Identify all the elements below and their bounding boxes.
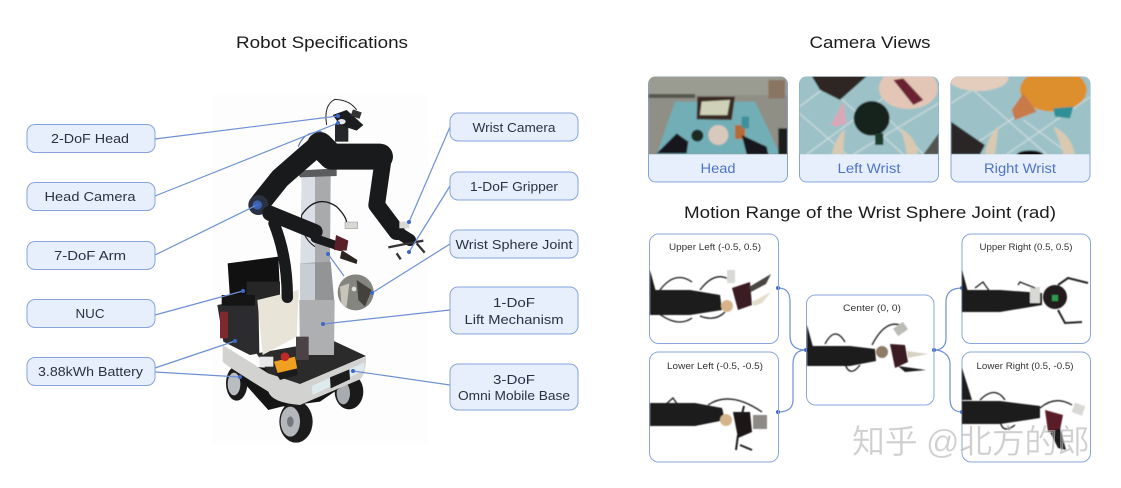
leader: battery [155, 339, 242, 379]
leader: wrist sphere joint [326, 244, 450, 295]
arm photo [807, 322, 928, 372]
leader: NUC [155, 289, 245, 315]
panel: Upper Left [650, 234, 778, 344]
label: 2-DoF Head [27, 124, 155, 152]
caption: Left Wrist: Left Wrist [838, 161, 901, 176]
label: Wrist Camera: Wrist Camera [472, 120, 556, 135]
leader: head camera [155, 121, 340, 196]
NUC [247, 282, 280, 302]
back left wheel [226, 366, 247, 401]
arm photo [650, 270, 771, 322]
caption: Right Wrist: Right Wrist [984, 161, 1056, 176]
base top deck [257, 340, 366, 384]
panel: Upper Right [962, 234, 1090, 344]
panel: left wrist camera [799, 76, 939, 182]
battery [217, 295, 259, 355]
heading: Robot Specifications: Robot Specifications [236, 34, 408, 52]
label: Wrist Sphere Joint [450, 230, 578, 258]
label: 3-DoF Omni Mobile Base: Omni Mobile Base [458, 388, 570, 403]
base shell [223, 345, 366, 405]
label: NUC: NUC [76, 306, 104, 321]
label: 3-DoF Omni Mobile Base [450, 364, 578, 410]
arm photo [962, 368, 1085, 450]
arm photo [962, 270, 1088, 323]
label: 1-DoF Lift Mechanism: 1-DoF [493, 295, 535, 310]
label: 1-DoF Lift Mechanism: Lift Mechanism [464, 312, 564, 327]
base underside [238, 367, 347, 410]
electronics box [257, 290, 299, 355]
photo: head view [648, 73, 790, 157]
leader: gripper [407, 186, 450, 254]
label: Head Camera: Head Camera [44, 189, 136, 204]
connectors [776, 286, 964, 414]
arm photo [650, 398, 767, 450]
caption: Lower Right (0.5, -0.5) [976, 361, 1074, 372]
base light strip [312, 363, 365, 395]
label: 3-DoF Omni Mobile Base: 3-DoF [493, 372, 535, 387]
caption: Center (0, 0) [843, 303, 901, 314]
heading: Camera Views: Camera Views [810, 34, 930, 52]
leader lines [155, 114, 450, 385]
leader: base [351, 369, 450, 385]
caption: Upper Left (-0.5, 0.5) [669, 242, 761, 253]
heading: Motion Range: Motion Range of the Wrist Sphere Joint (rad) [684, 204, 1056, 222]
panel: right wrist camera [950, 76, 1090, 182]
label: NUC [27, 300, 155, 328]
robot photo [212, 95, 429, 445]
panel: Center [806, 295, 934, 405]
label: Wrist Camera [450, 113, 578, 141]
head [298, 99, 363, 147]
label: 1-DoF Gripper [450, 172, 578, 200]
panel: Lower Right [962, 352, 1090, 462]
lift column [299, 175, 335, 355]
right arm and torso [320, 145, 425, 259]
monitor [228, 257, 280, 298]
photo: left wrist view [800, 76, 938, 154]
wrist sphere inset [338, 274, 374, 310]
leader: 2-DoF head [155, 114, 340, 139]
panel: Lower Left [650, 352, 778, 462]
cable carrier [274, 223, 287, 297]
label: 2-DoF Head: 2-DoF Head [51, 131, 129, 146]
leader: lift [321, 310, 450, 326]
front wheel [279, 401, 313, 443]
label: 3.88kWh Battery: 3.88kWh Battery [38, 364, 144, 379]
top plate [297, 168, 337, 177]
label: 7-DoF Arm [27, 242, 155, 270]
label: Wrist Sphere Joint: Wrist Sphere Joint [456, 237, 573, 252]
right wheel [335, 374, 363, 409]
label: Head Camera [27, 182, 155, 210]
caption: Head: Head [700, 161, 736, 176]
leader: wrist camera [407, 127, 450, 224]
label: 1-DoF Lift Mechanism [450, 287, 578, 334]
left arm [248, 145, 358, 264]
label: 7-DoF Arm: 7-DoF Arm [54, 248, 126, 263]
emergency stop [259, 337, 309, 380]
label: 3.88kWh Battery [27, 358, 155, 386]
label: 1-DoF Gripper: 1-DoF Gripper [470, 179, 559, 194]
caption: Lower Left (-0.5, -0.5) [667, 361, 763, 372]
leader: 7-DoF arm [155, 203, 259, 255]
photo: right wrist view [951, 76, 1090, 154]
caption: Upper Right (0.5, 0.5) [980, 242, 1072, 253]
watermark: 知乎 @北方的郎 [852, 423, 1090, 460]
panel: head camera [648, 73, 790, 182]
